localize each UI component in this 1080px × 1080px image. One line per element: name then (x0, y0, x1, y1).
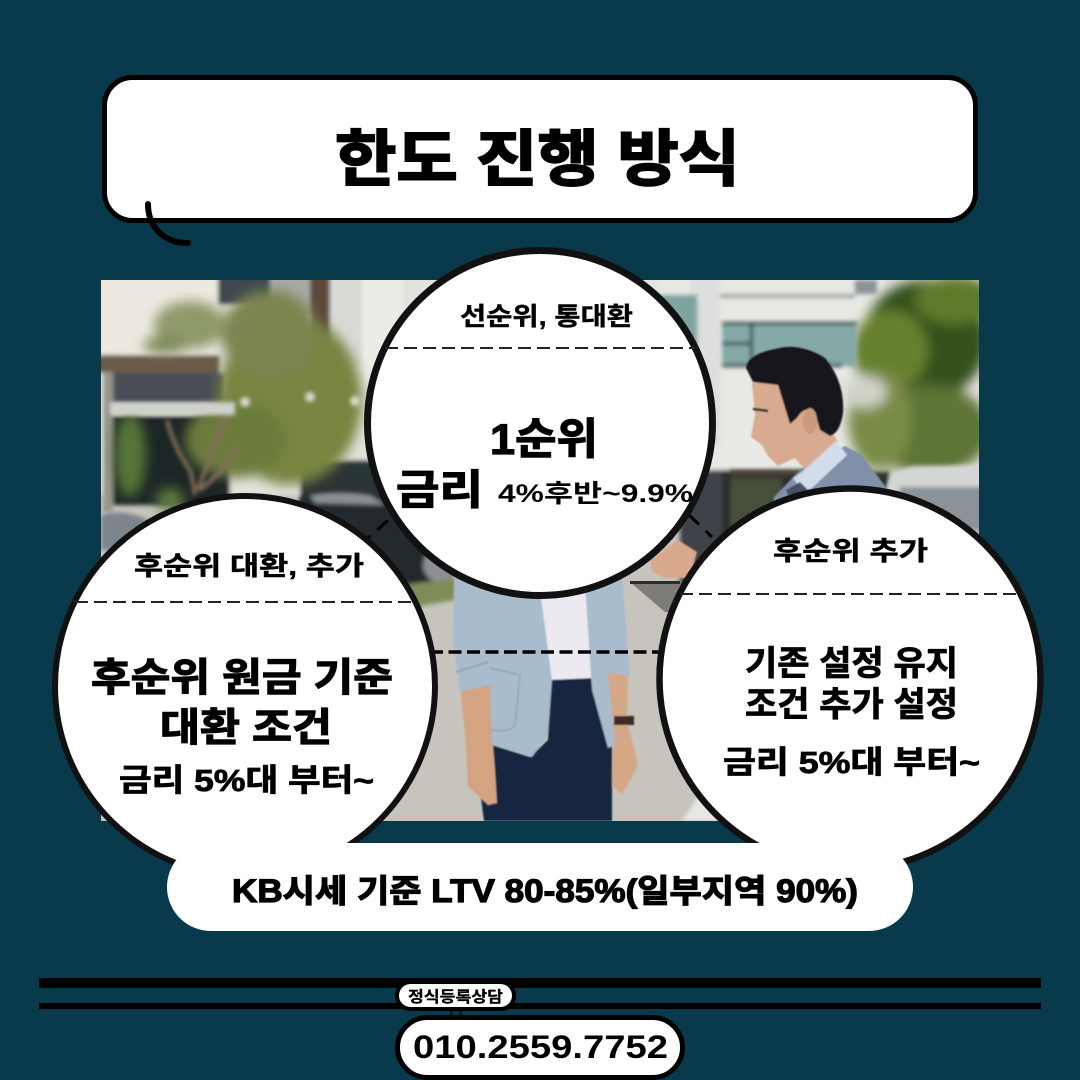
man's hand (650, 540, 697, 578)
LTV banner (167, 843, 913, 931)
eyebrow (753, 409, 768, 411)
ear (803, 408, 817, 434)
badge text: 정식등록상담 (408, 988, 503, 1006)
shirt (540, 593, 592, 682)
registered consultation badge (397, 982, 514, 1009)
left forearm and hand (461, 683, 497, 805)
trousers (480, 678, 612, 821)
top rate label: 금리 (396, 467, 483, 513)
divider (385, 347, 697, 349)
left main text: 후순위 원금 기준 (91, 657, 393, 700)
pocket (490, 668, 520, 731)
divider (680, 593, 1026, 595)
tablet (632, 584, 680, 612)
hair (746, 347, 843, 436)
top main text: 1순위 (490, 416, 598, 464)
divider (75, 601, 415, 603)
left main text line 2: 대환 조건 (160, 707, 332, 750)
phone number: 010.2559.7752 (413, 1029, 668, 1065)
phone number pill (398, 1018, 682, 1078)
footer lines (39, 978, 1041, 1009)
jacket left (453, 575, 552, 757)
left cars (300, 493, 455, 585)
LTV text: KB시세 기준 LTV 80-85%(일부지역 90%) (232, 873, 858, 909)
man (745, 346, 888, 502)
right rate: 금리 5%대 부터~ (723, 745, 980, 780)
connector ticks (451, 1007, 461, 1016)
right main text line 2: 조건 추가 설정 (745, 686, 958, 724)
right car (884, 462, 979, 491)
grass (405, 578, 455, 607)
top rate value: 4%후반~9.9% (498, 480, 693, 508)
circle panel: right, second-lien addition (660, 488, 1040, 870)
sleeve cuff line (456, 662, 488, 672)
top heading: 선순위, 통대환 (460, 303, 633, 331)
connector dashes (360, 515, 712, 652)
tie (786, 482, 808, 496)
tree foliage (114, 276, 995, 512)
blurred background (95, 275, 995, 600)
neck and face (751, 370, 838, 470)
photo: man and woman outside a building (95, 275, 995, 830)
right forearm and hand (608, 672, 638, 795)
left heading: 후순위 대환, 추가 (134, 551, 364, 581)
jacket right (585, 575, 630, 748)
details (101, 280, 985, 830)
circle panel: left, second-lien refinance (55, 496, 435, 876)
shirt collar (793, 441, 847, 492)
right heading: 후순위 추가 (773, 536, 928, 566)
title: 한도 진행 방식 (335, 125, 740, 193)
suit (772, 446, 888, 502)
speech bubble tail (148, 204, 188, 243)
title box (104, 78, 976, 243)
right main text: 기존 설정 유지 (745, 645, 958, 683)
watch (614, 716, 634, 725)
circle panel: top, first-lien (368, 250, 712, 596)
road marking (682, 765, 725, 821)
woman (453, 575, 638, 821)
left rate: 금리 5%대 부터~ (119, 763, 374, 798)
